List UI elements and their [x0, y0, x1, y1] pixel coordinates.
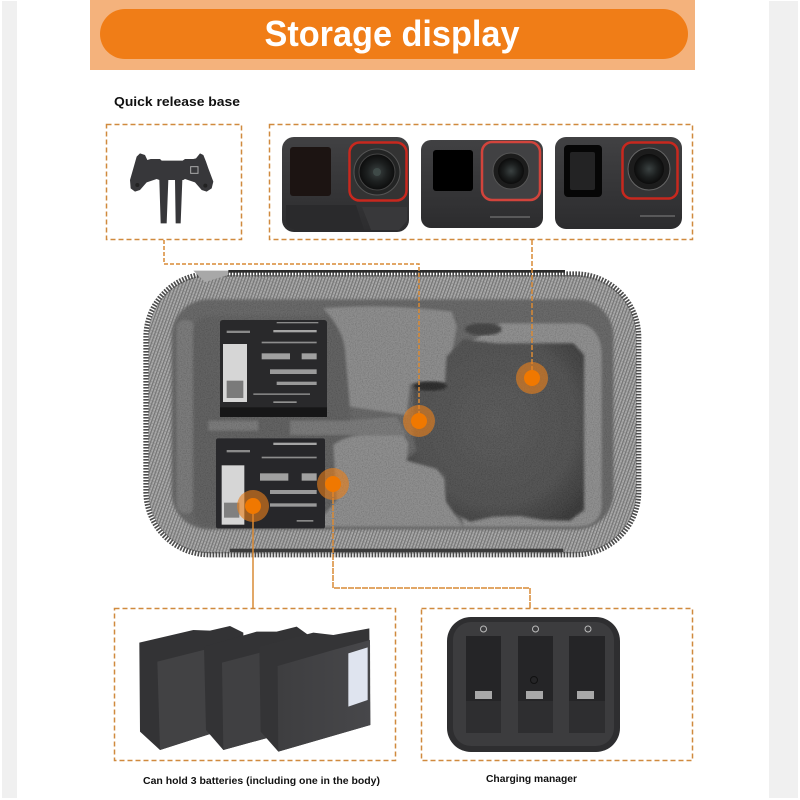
- battery bottom: [216, 438, 325, 528]
- crease shadow: [413, 381, 447, 391]
- battery rear: [139, 626, 243, 750]
- slot 2: [518, 626, 553, 733]
- camera 2: [421, 140, 543, 228]
- battery front: [259, 628, 370, 752]
- title pill: [100, 9, 688, 59]
- heading: quick release base: Quick release base: [114, 94, 240, 109]
- charging manager device: [447, 617, 620, 752]
- foam block upper: [323, 306, 457, 415]
- side strip right: [769, 1, 798, 798]
- marker: batteries: [237, 490, 269, 522]
- leader: cameras: [531, 240, 533, 378]
- three batteries: [139, 626, 370, 752]
- marker: quick release base: [403, 405, 435, 437]
- panel: batteries: [114, 608, 396, 760]
- dark crease: [465, 323, 502, 335]
- battery top: [220, 320, 327, 417]
- left recess: [193, 317, 350, 527]
- storage case: [146, 270, 639, 555]
- leader: quick release base: [164, 240, 419, 421]
- caption: batteries: Can hold 3 batteries (including one in the body): [143, 775, 380, 787]
- case lining: [172, 299, 613, 529]
- camera 1: [282, 137, 409, 232]
- slot 1: [466, 626, 501, 733]
- battery middle: [204, 627, 308, 750]
- lining left strip: [177, 320, 195, 513]
- panel: cameras: [270, 124, 692, 240]
- foam block lower: [320, 435, 463, 527]
- camera 3: [555, 137, 682, 229]
- caption: charging manager: Charging manager: [486, 773, 577, 785]
- top edge: [228, 270, 565, 273]
- marker: cameras: [516, 362, 548, 394]
- case knit band: [148, 275, 637, 553]
- marker: charging manager: [317, 468, 349, 500]
- zipper pull: [193, 271, 228, 282]
- panel: charging manager: [422, 608, 692, 760]
- foam divider: [208, 417, 407, 435]
- leader: charging manager: [333, 484, 530, 608]
- camera recess: [407, 339, 584, 522]
- title: Storage display: [264, 13, 520, 54]
- case zipper coil: [146, 274, 639, 555]
- lining ridge: [443, 323, 602, 527]
- panel: quick release base: [106, 124, 242, 240]
- icon: quick release base: [130, 153, 213, 223]
- bottom edge: [230, 549, 563, 552]
- header band: [90, 0, 695, 70]
- leader: batteries: [252, 506, 254, 608]
- slot 3: [569, 626, 605, 733]
- side strip left: [2, 1, 17, 798]
